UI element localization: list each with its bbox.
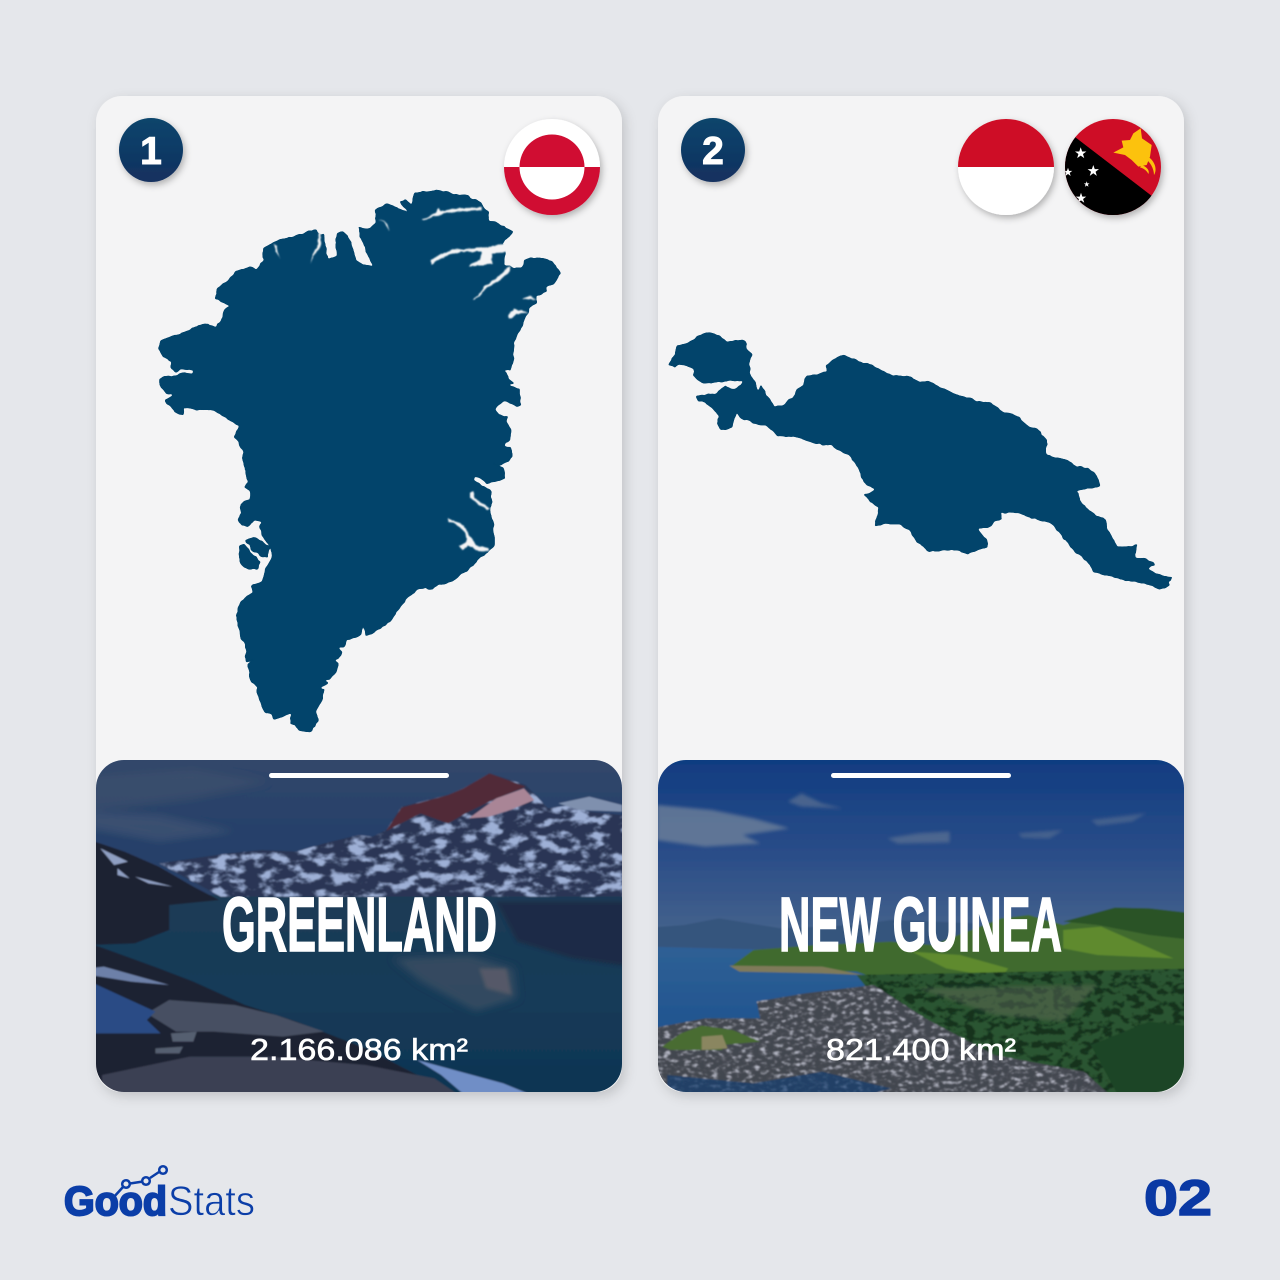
stilt village	[658, 984, 1108, 1092]
photo: New Guinea harbour	[658, 760, 1184, 1092]
flag: Greenland	[504, 119, 600, 215]
town land	[856, 969, 1184, 1092]
page number: 02	[1144, 1170, 1212, 1226]
handle bar	[831, 773, 1011, 778]
logo wordmark: Good	[64, 1178, 167, 1224]
stat: New Guinea area: 821.400 km²	[826, 1032, 1016, 1067]
title: GREENLAND: GREENLAND	[222, 882, 497, 968]
photo: Greenland fjord	[96, 760, 622, 1092]
distant hills	[650, 918, 977, 955]
map: Greenland fjords	[273, 207, 537, 552]
badge: number 2: 2	[702, 130, 724, 173]
map: Greenland silhouette	[158, 190, 561, 732]
sky	[96, 760, 622, 896]
green hills	[731, 908, 1208, 1008]
map: New Guinea silhouette	[668, 333, 1173, 589]
logo: GoodStats	[64, 1166, 255, 1224]
left hill	[90, 840, 219, 945]
logo wordmark: Stats: Stats	[168, 1177, 255, 1224]
water	[100, 895, 622, 1092]
card background: Greenland	[96, 96, 622, 1092]
card background: New Guinea	[658, 96, 1184, 1092]
panel: New Guinea	[643, 96, 1208, 1108]
logo icon: chart line	[113, 1166, 167, 1198]
sky	[658, 760, 1184, 928]
panel: Greenland	[83, 96, 648, 1108]
stat: Greenland area: 2.166.086 km²	[250, 1032, 468, 1067]
foreground rocks	[96, 945, 417, 1082]
island	[662, 1026, 760, 1050]
badge: number 2	[681, 118, 745, 182]
flag: Indonesia	[958, 119, 1054, 215]
badge: number 1: 1	[140, 130, 162, 173]
flag: Papua New Guinea	[1064, 119, 1161, 215]
badge: number 1	[119, 118, 183, 182]
handle bar	[269, 773, 449, 778]
distant mountain	[159, 773, 648, 897]
water	[643, 942, 891, 1108]
title: NEW GUINEA: NEW GUINEA	[779, 882, 1062, 968]
